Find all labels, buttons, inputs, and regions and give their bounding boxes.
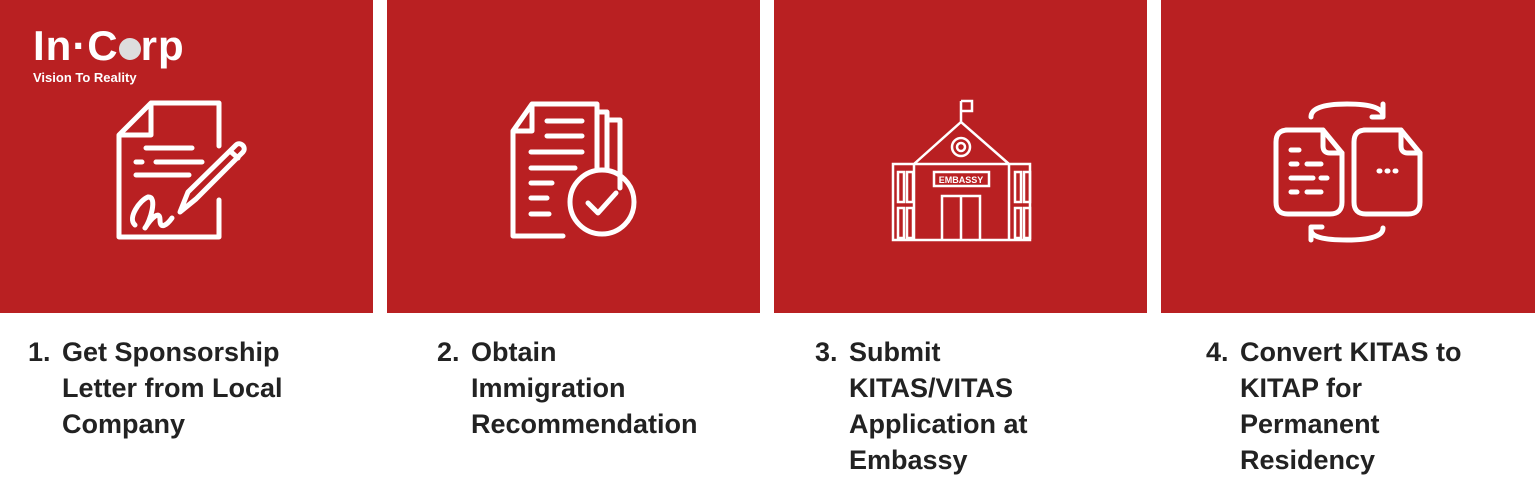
logo: In·C rp [33, 22, 185, 69]
text: step 2: 2. [437, 337, 460, 367]
text: step 3: 3. [815, 337, 838, 367]
panel: step 1 [0, 0, 373, 313]
text: step 4: Convert KITAS to KITAP for Permanent Residency [1240, 337, 1462, 475]
panel: step 4 [1161, 0, 1535, 313]
icon: converting documents [1274, 102, 1422, 242]
panel: step 2 [387, 0, 760, 313]
text: step 2: Obtain Immigration Recommendation [471, 337, 698, 439]
text: step 3: Submit KITAS/VITAS Application at Embassy [849, 337, 1028, 475]
panel: step 3 [774, 0, 1147, 313]
text: step 4: 4. [1206, 337, 1229, 367]
text: step 1: 1. [28, 337, 51, 367]
logo: Vision To Reality [33, 70, 137, 85]
icon: embassy building [892, 100, 1032, 242]
icon: embassy building: EMBASSY [939, 175, 983, 185]
icon: signed document [116, 100, 247, 240]
text: step 1: Get Sponsorship Letter from Local Company [62, 337, 283, 439]
icon: documents with check [510, 102, 636, 238]
